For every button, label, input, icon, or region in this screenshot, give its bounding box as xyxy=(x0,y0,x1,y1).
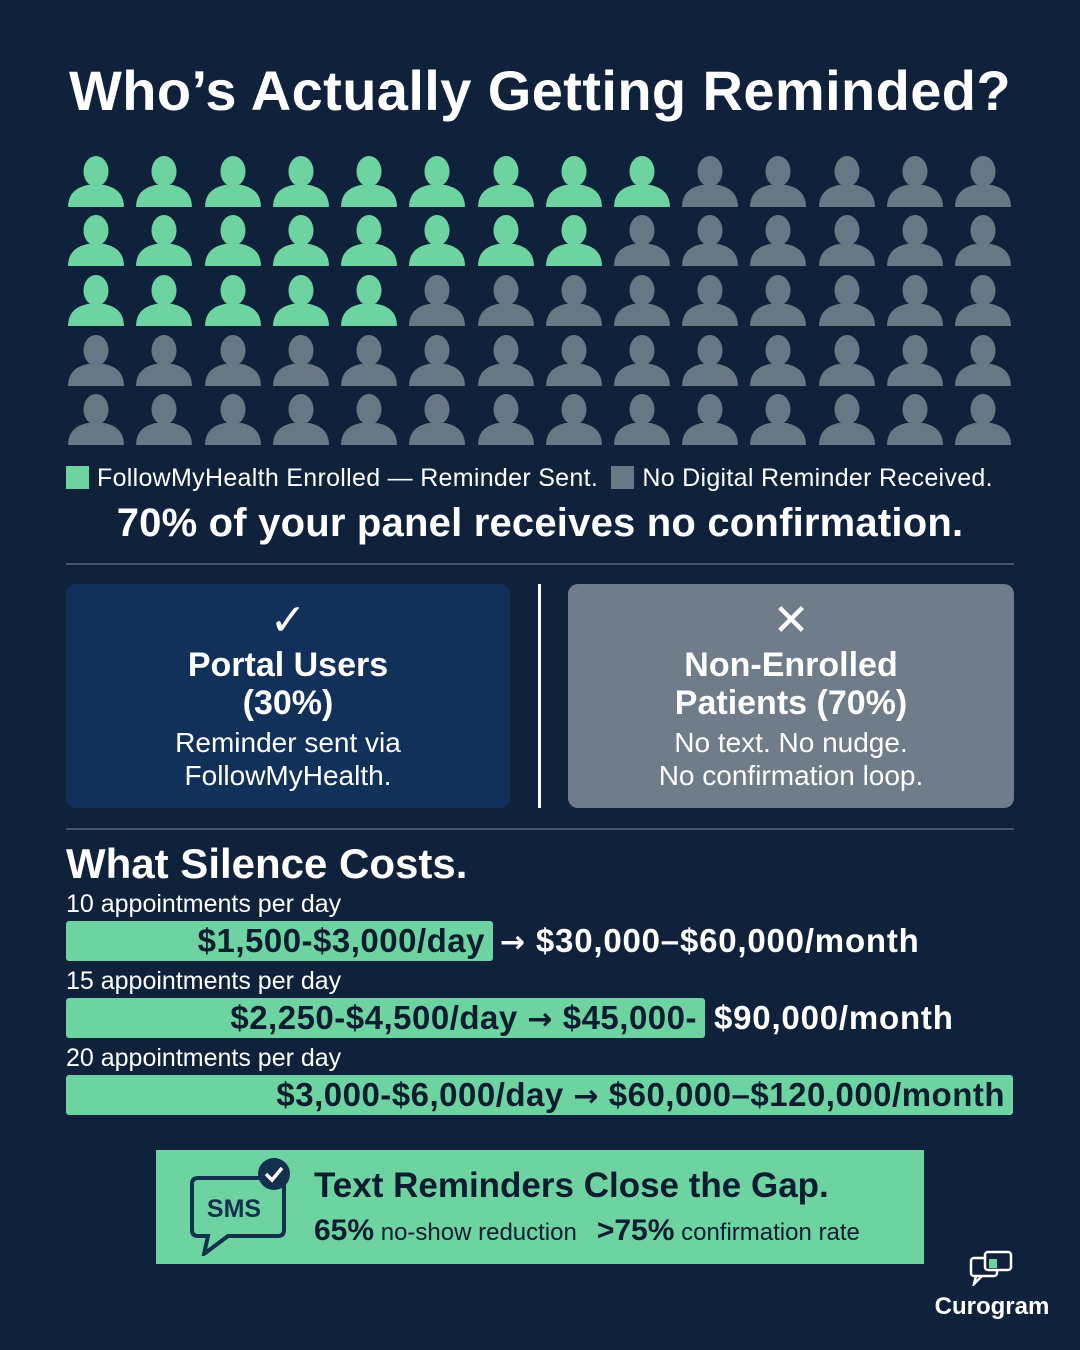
icon: sms xyxy=(190,1158,290,1256)
callout: text reminders xyxy=(156,1150,924,1264)
panel: non-enrolled: No confirmation loop. xyxy=(659,760,923,791)
logo: curogram xyxy=(935,1250,1049,1320)
panel: non-enrolled: Patients (70%) xyxy=(675,684,907,722)
cost rows xyxy=(66,890,1013,1115)
panel: portal users: FollowMyHealth. xyxy=(185,760,391,791)
cost rows: 15 appointments per day xyxy=(66,967,341,995)
icon grid: patients xyxy=(68,156,1011,445)
cost rows: $3,000-$6,000/day → $60,000–$120,000/month xyxy=(276,1076,1005,1114)
legend: FollowMyHealth Enrolled — Reminder Sent. No Digital Reminder Received. xyxy=(97,464,993,492)
panel: non-enrolled: Non-Enrolled xyxy=(684,646,898,684)
icon: check: ✓ xyxy=(270,596,306,645)
cost rows: 10 appointments per day xyxy=(66,890,341,918)
icon: x: ✕ xyxy=(773,596,809,645)
cost rows: → $30,000–$60,000/month xyxy=(500,922,920,960)
cost rows: $2,250-$4,500/day → $45,000- xyxy=(230,999,697,1037)
cost rows: $90,000/month xyxy=(714,999,954,1036)
panel: portal users: Portal Users xyxy=(188,646,388,684)
cost rows: 20 appointments per day xyxy=(66,1044,341,1072)
logo: curogram: Curogram xyxy=(935,1293,1049,1320)
panel: portal users: (30%) xyxy=(243,684,333,722)
icon: sms: SMS xyxy=(207,1195,261,1223)
panel: non-enrolled xyxy=(568,584,1014,808)
panel: portal users: Reminder sent via xyxy=(175,727,401,758)
title: Who’s Actually Getting Reminded? xyxy=(69,59,1011,122)
callout: text reminders: Text Reminders Close the Gap. xyxy=(314,1166,829,1205)
panel: portal users xyxy=(66,584,510,808)
cost rows: $1,500-$3,000/day xyxy=(198,922,485,959)
headline stat: 70% of your panel receives no confirmation. xyxy=(117,501,963,545)
section heading: What Silence Costs. xyxy=(66,840,467,887)
panel: non-enrolled: No text. No nudge. xyxy=(674,727,908,758)
callout: text reminders: 65% no-show reduction >75% confirmation rate xyxy=(314,1214,860,1247)
